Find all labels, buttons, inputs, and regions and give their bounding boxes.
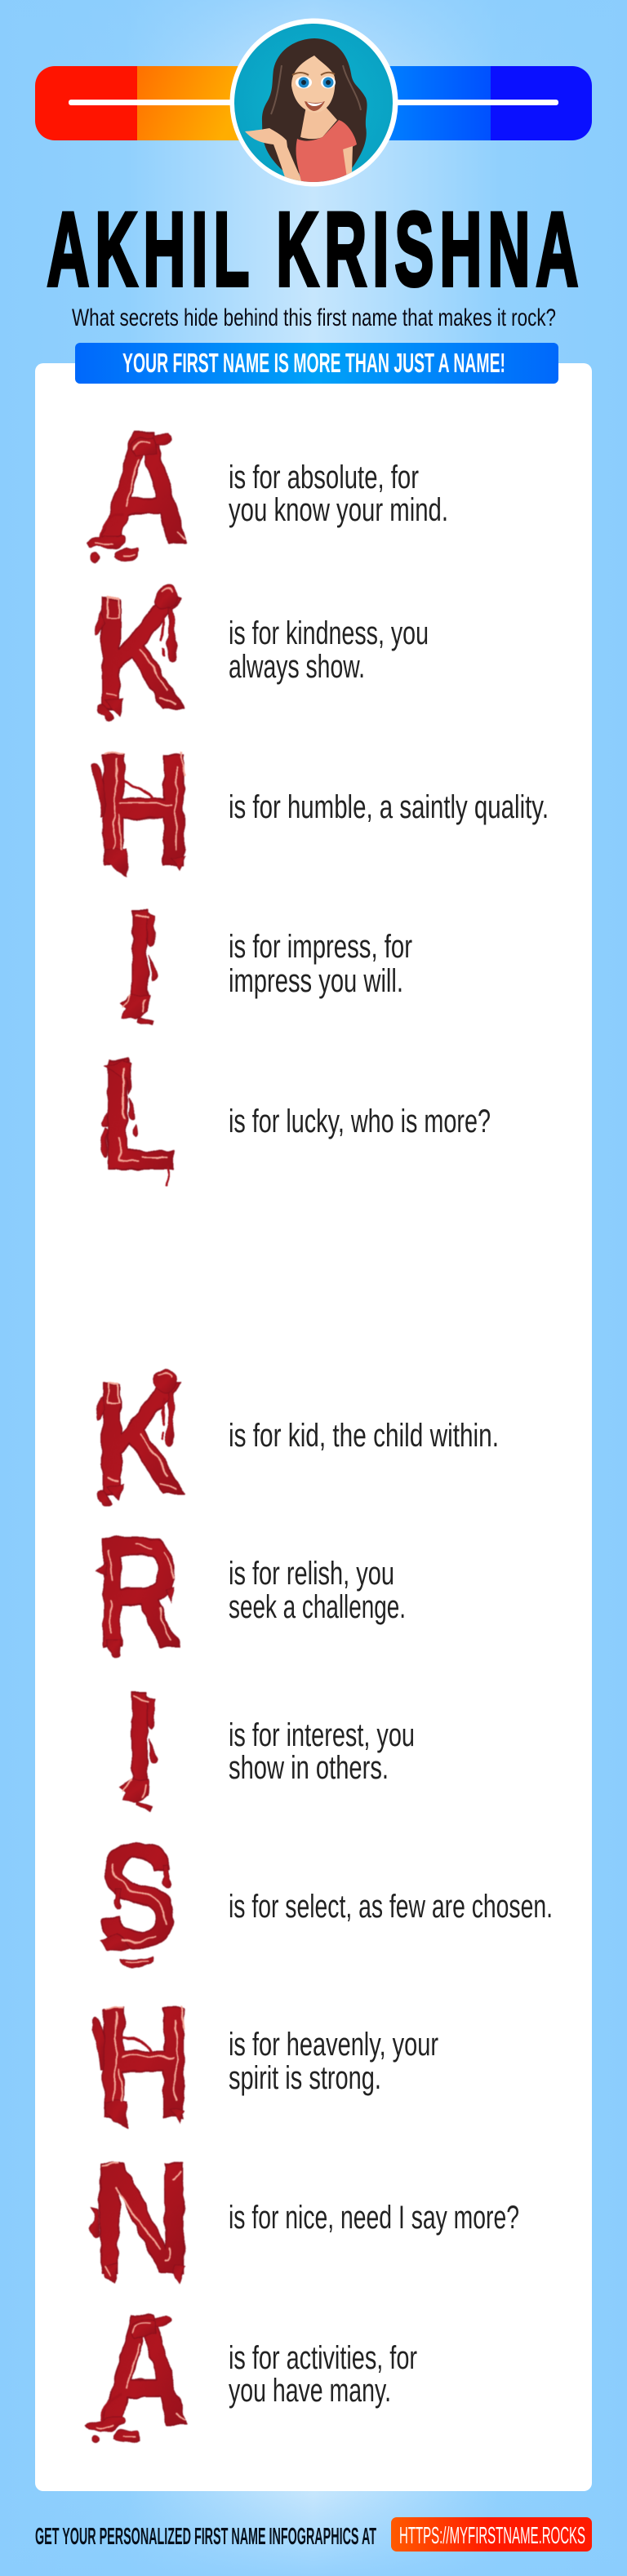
text: letter H: spirit is strong.: [229, 2060, 381, 2096]
text: letter I: [229, 1717, 415, 1786]
letter K: K: [94, 564, 185, 743]
letter R: R: [96, 1503, 182, 1681]
text: letter A: is for activities, for: [229, 2340, 417, 2376]
text: letter R: is for relish, you: [229, 1556, 394, 1592]
text: letter A: is for absolute, for: [229, 460, 419, 495]
letter S: S: [98, 1814, 178, 1978]
text: letter I: impress you will.: [229, 963, 403, 999]
letter A: A: [98, 2281, 189, 2459]
text: letter K: [229, 615, 429, 685]
text: letter R: [229, 1556, 406, 1625]
text: letter H: is for heavenly, your: [229, 2027, 438, 2063]
text: letter I: show in others.: [229, 1750, 389, 1786]
letter I: I: [125, 881, 154, 1036]
text: letter K: is for kid, the child within.: [229, 1418, 499, 1454]
text: letter A: you know your mind.: [229, 492, 448, 528]
text: letter A: [229, 460, 448, 528]
text: letter L: is for lucky, who is more?: [229, 1104, 491, 1139]
letter K: K: [94, 1349, 185, 1528]
letter I: I: [125, 1664, 154, 1819]
letter H: H: [95, 721, 193, 899]
footer url button: [391, 2517, 592, 2552]
banner: [75, 343, 558, 384]
title: AKHIL KRISHNA: [47, 191, 578, 308]
white content panel: [35, 363, 592, 2491]
avatar: cartoon woman in circle: [230, 18, 398, 186]
text: letter N: is for nice, need I say more?: [229, 2200, 519, 2236]
text: letter I: [229, 929, 412, 999]
header colour bar: [35, 66, 592, 140]
letter L: L: [100, 1024, 178, 1203]
text: letter K: is for kindness, you: [229, 615, 429, 651]
text: letter K: always show.: [229, 649, 365, 685]
text: letter A: you have many.: [229, 2373, 391, 2409]
text: letter H: [229, 2027, 438, 2096]
letter H: H: [95, 1974, 193, 2152]
text: letter I: is for impress, for: [229, 929, 412, 965]
letter A: A: [98, 398, 189, 577]
text: letter A: [229, 2340, 417, 2409]
text: letter I: is for interest, you: [229, 1717, 415, 1753]
letter N: N: [91, 2129, 193, 2307]
text: letter R: seek a challenge.: [229, 1589, 406, 1625]
